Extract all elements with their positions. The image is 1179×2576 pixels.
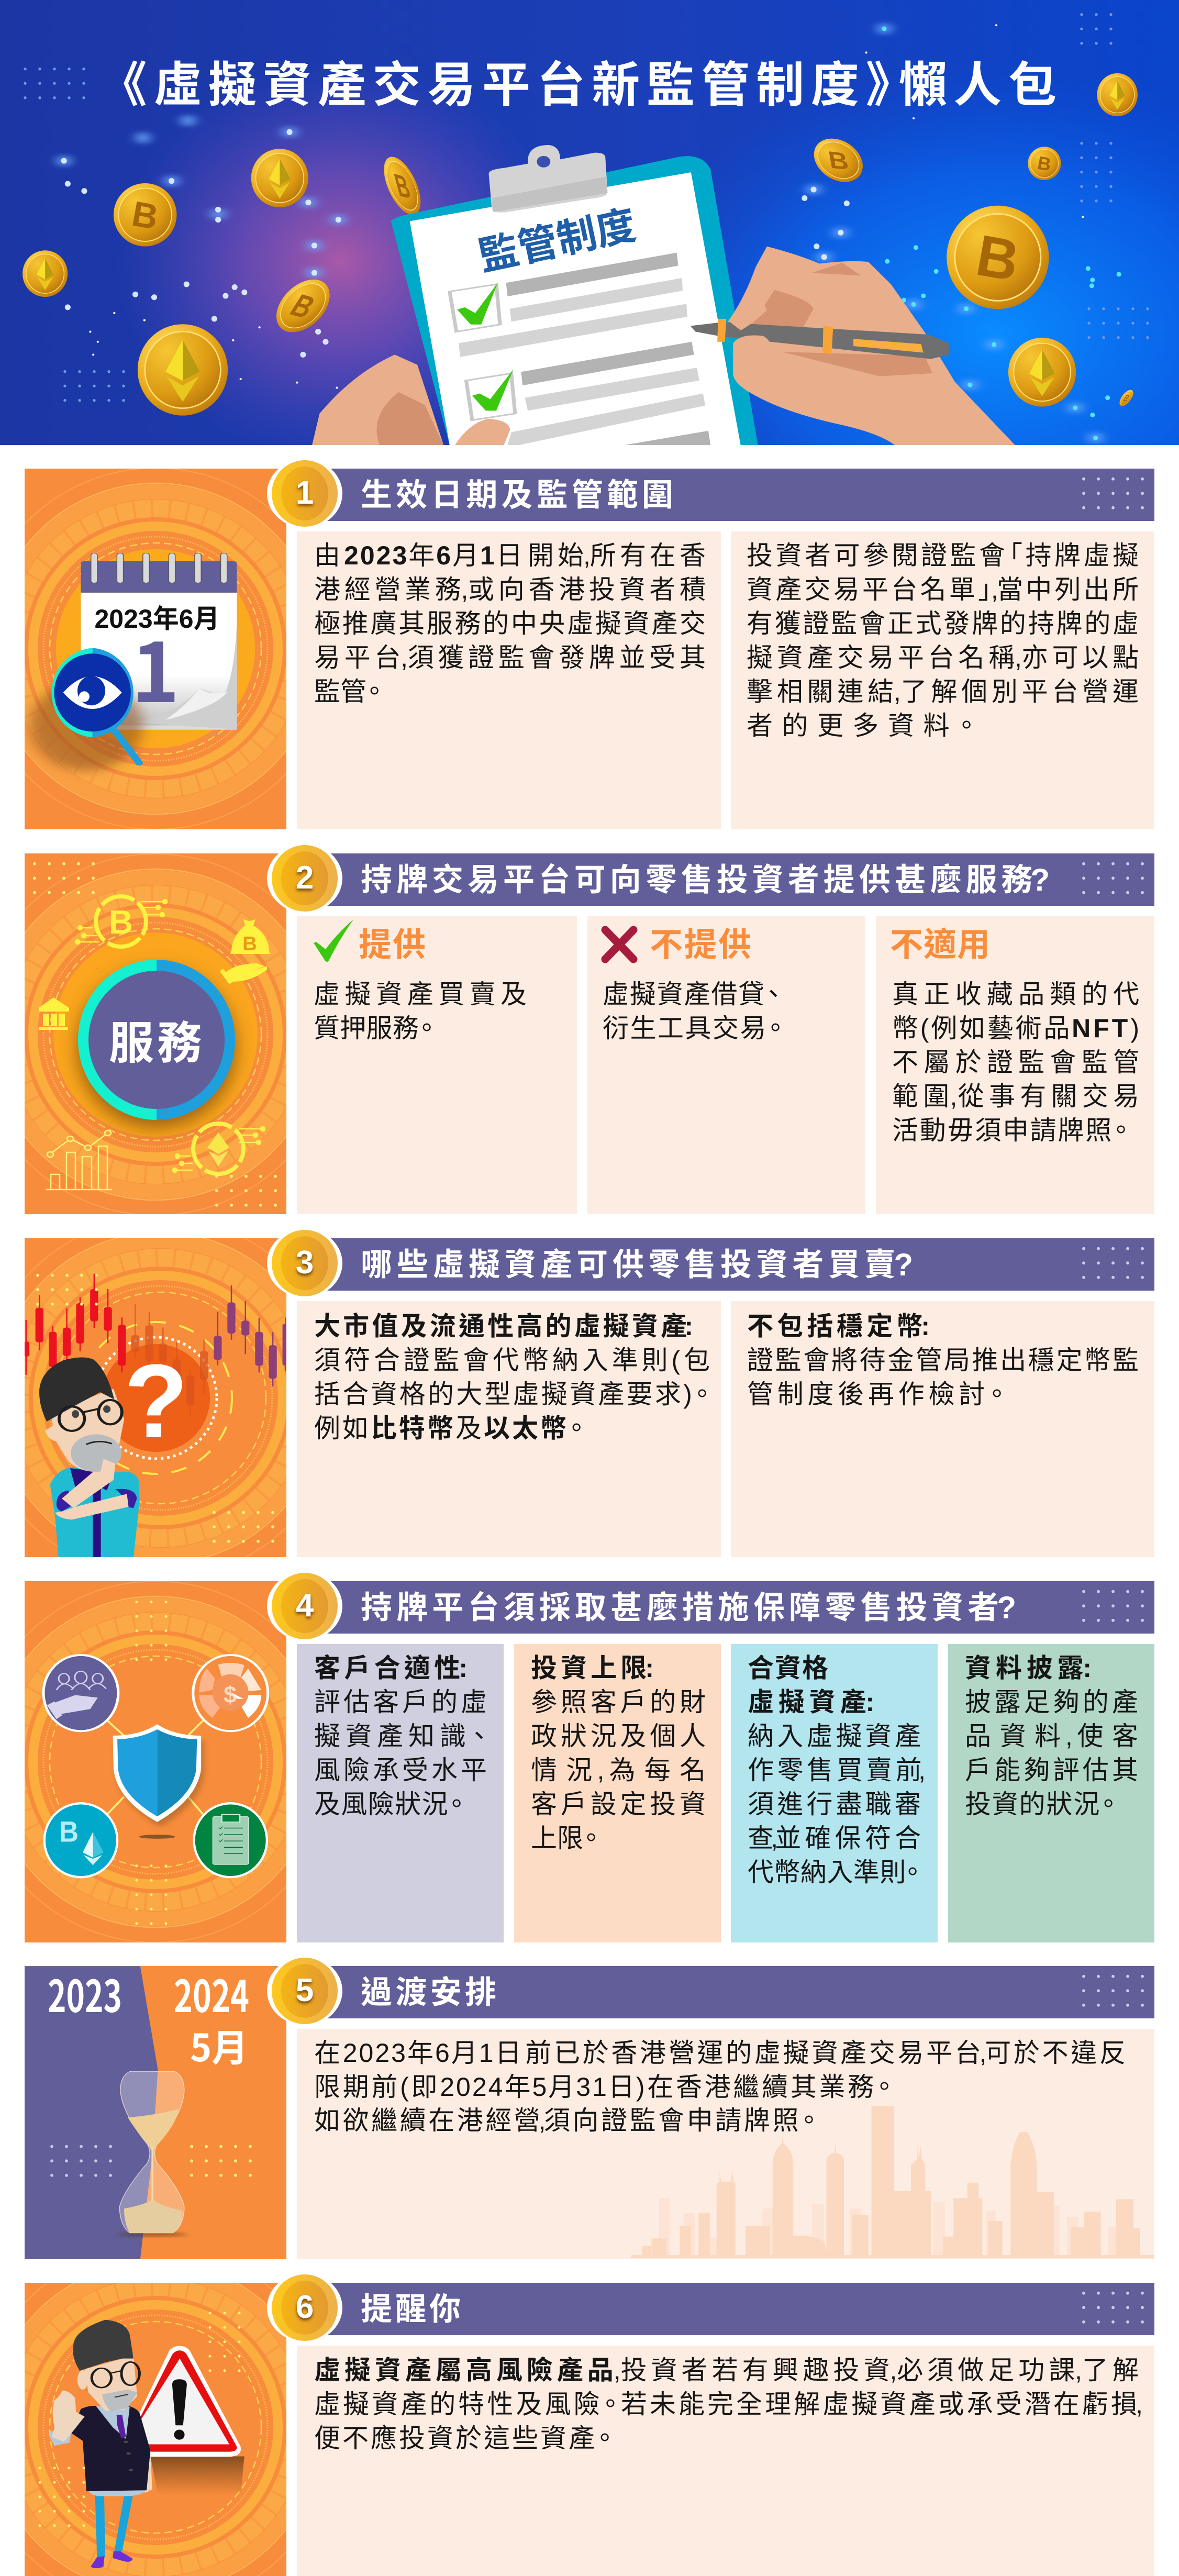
icon: money bag on hand xyxy=(220,919,270,984)
dots on panel top xyxy=(129,1595,173,1667)
number badge 5 xyxy=(267,1957,342,2025)
icon: ethereum ring xyxy=(173,1124,265,1174)
icon: thinking man xyxy=(39,1358,140,1557)
heading: 哪些虛擬資產可供零售投資者買賣? xyxy=(361,1247,913,1282)
icon: bar chart xyxy=(46,1130,112,1190)
section header bar xyxy=(314,1966,1154,2018)
section 4: investor protection xyxy=(25,1573,1154,1942)
text panel: large cap assets: 括合資格的大型虛擬資產要求)。 xyxy=(314,1380,715,1409)
panel: calendar illustration xyxy=(25,469,286,829)
panel: thinking man illustration xyxy=(25,1238,286,1557)
dots on bar xyxy=(1076,472,1150,515)
text panel: investment limit: 客戶設定投資 xyxy=(531,1790,706,1819)
header banner illustration xyxy=(0,0,1179,445)
text panel: risk reminder: 虛擬資產屬高風險產品,投資者若有興趣投資,必須做足功課,了解 xyxy=(314,2356,1139,2385)
text panel: client suitability: 評估客戶的虛 xyxy=(314,1687,487,1717)
text panel: investment limit: 投資上限: xyxy=(531,1653,654,1683)
text panel: transition: 如欲繼續在港經營,須向證監會申請牌照。 xyxy=(314,2106,822,2135)
text panel: not applicable: 真正收藏品類的代 xyxy=(892,980,1139,1009)
number badge 1 xyxy=(267,459,342,528)
dots on panel lower xyxy=(207,1505,280,1549)
number badge 4 xyxy=(267,1572,342,1640)
icon: services circle: 服務 xyxy=(109,1018,205,1069)
text panel: effective date: 極推廣其服務的中央虛擬資產交 xyxy=(314,609,706,638)
month May: 5月 xyxy=(190,2017,248,2072)
label: provided: 提供 xyxy=(359,927,426,963)
skyline illustration xyxy=(297,2029,1154,2259)
icon: people in hand xyxy=(42,1654,119,1732)
icon: bitcoin ring: B xyxy=(109,903,133,941)
text panel: provided: 質押服務。 xyxy=(314,1014,440,1043)
text panel: licensed list: 者的更多資料。 xyxy=(747,711,980,740)
text panel: eligible assets: 合資格 xyxy=(748,1653,828,1683)
text panel: provided xyxy=(297,916,577,1214)
sparkles xyxy=(64,25,1119,438)
section header bar xyxy=(314,1238,1154,1291)
text panel: disclosure: 投資的狀況。 xyxy=(965,1790,1121,1819)
text panel: transition: 2024年5月31日 xyxy=(440,2072,636,2102)
text panel: not applicable: NFT xyxy=(1072,1014,1130,1043)
text panel: investment limit: 政狀況及個人 xyxy=(531,1722,706,1751)
text panel: large cap assets: 大市值及流通性高的虛擬資產: xyxy=(314,1312,693,1341)
section 1: effective date and scope xyxy=(25,460,1154,829)
title: 《虛擬資產交易平台新監管制度》懶人包 xyxy=(99,59,1056,112)
text panel: stablecoins excluded: 管制度後再作檢討。 xyxy=(747,1380,1010,1409)
number badge 3 xyxy=(267,1229,342,1297)
text panel: transition xyxy=(297,2029,1154,2259)
text panel: investment limit: 上限。 xyxy=(531,1824,604,1853)
panel: hourglass illustration xyxy=(25,1966,286,2259)
text panel: investment limit xyxy=(514,1644,721,1942)
section 2: services xyxy=(25,845,1154,1214)
dots on panel xyxy=(27,857,101,900)
dots on panel bottom xyxy=(129,1859,173,1931)
icon: risk gauge: $ xyxy=(224,1682,237,1708)
text panel: eligible assets: 虛擬資產: xyxy=(748,1687,874,1717)
section 3: eligible assets xyxy=(25,1230,1154,1557)
text panel: disclosure: 資料披露: xyxy=(965,1653,1092,1683)
background glow xyxy=(115,63,1179,607)
text panel: eligible assets: 納入虛擬資產 xyxy=(748,1722,921,1751)
text panel: effective date: 港經營業務,或向香港投資者積 xyxy=(314,575,706,604)
number badge 5: 5 xyxy=(296,1972,314,2008)
text panel: large cap assets: 須符合證監會代幣納入準則(包 xyxy=(314,1346,710,1375)
dots on purple side xyxy=(45,2139,118,2183)
heading: 持牌交易平台可向零售投資者提供甚麼服務? xyxy=(361,862,1050,897)
text panel: eligible assets: 作零售買賣前, xyxy=(748,1756,926,1785)
text panel: licensed list: 投資者可參閱證監會「持牌虛擬 xyxy=(747,541,1139,570)
calendar day number: 1 xyxy=(131,607,180,726)
checklist bars xyxy=(459,253,710,445)
label: not provided: 不提供 xyxy=(650,927,751,963)
left thumb xyxy=(455,419,510,445)
text panel: not applicable: 幣(例如藝術品 ) xyxy=(892,1014,1139,1043)
icon: gold coins xyxy=(23,73,1138,416)
clipboard heading: 監管制度 xyxy=(475,203,640,280)
text panel: licensed list: 擬資產交易平台名稱,亦可以點 xyxy=(747,643,1139,672)
icon: magnifier with eye xyxy=(30,648,143,771)
text panel: stablecoins excluded: 證監會將待金管局推出穩定幣監 xyxy=(747,1346,1139,1375)
heading: 提醒你 xyxy=(361,2292,461,2327)
dot grids on banner xyxy=(24,13,1149,402)
number badge 3: 3 xyxy=(296,1245,314,1281)
section header bar xyxy=(314,2283,1154,2335)
text panel: eligible assets xyxy=(731,1644,938,1942)
section 5: transitional arrangement xyxy=(25,1966,1154,2259)
text panel: not applicable: 不屬於證監會監管 xyxy=(892,1048,1139,1077)
connector lines xyxy=(107,1720,203,1814)
icon: red cross xyxy=(601,926,638,963)
icon: money bag on hand: B xyxy=(242,933,257,955)
text panel: effective date: 由 開始,所有在香 xyxy=(314,541,706,570)
icon: green check xyxy=(314,919,353,962)
text panel: client suitability: 擬資產知識、 xyxy=(314,1722,492,1751)
text panel: licensed list xyxy=(731,531,1154,829)
clipboard xyxy=(391,145,758,445)
text panel: effective date: 易平台,須獲證監會發牌並受其 xyxy=(314,643,706,672)
icon: shield xyxy=(113,1724,204,1839)
text panel: licensed list: 資產交易平台名單」,當中列出所 xyxy=(747,575,1139,604)
text panel: provided: 虛擬資產買賣及 xyxy=(314,980,527,1009)
icon: crypto symbols xyxy=(43,1802,118,1878)
text panel: client suitability: 客戶合適性: xyxy=(314,1653,468,1683)
section 6: reminder xyxy=(25,2283,1154,2576)
number badge 1: 1 xyxy=(296,475,314,511)
text panel: disclosure xyxy=(948,1644,1154,1942)
text panel: not provided xyxy=(587,916,865,1214)
dots on bar xyxy=(1076,2286,1150,2329)
text panel: client suitability xyxy=(297,1644,504,1942)
number badge 6: 6 xyxy=(296,2289,314,2325)
heading: 生效日期及監管範圍 xyxy=(361,478,673,513)
text panel: disclosure: 戶能夠評估其 xyxy=(965,1756,1138,1785)
text panel: risk reminder: 便不應投資於這些資產。 xyxy=(314,2424,618,2453)
dots on bar xyxy=(1076,857,1150,900)
text panel: investment limit: 參照客戶的財 xyxy=(531,1687,706,1717)
icon: right hand with pen xyxy=(690,247,1015,445)
text panel: not provided: 虛擬資產借貸、 xyxy=(603,980,786,1009)
icon: bitcoin ring xyxy=(75,896,167,947)
dots on panel lower xyxy=(209,1169,283,1213)
text panel: licensed list: 有獲證監會正式發牌的持牌的虛 xyxy=(747,609,1139,638)
icon: man gesturing stop xyxy=(50,2320,152,2568)
dots on bar xyxy=(1076,1584,1150,1628)
text panel: transition: 2023年6月1日 xyxy=(343,2038,523,2068)
dots on bar xyxy=(1076,1969,1150,2013)
number badge 6 xyxy=(267,2273,342,2342)
text panel: eligible assets: 查,並確保符合 xyxy=(748,1824,921,1853)
text panel: risk reminder: 虛擬資產的特性及風險。若未能完全理解虛擬資產或承受潛在虧損, xyxy=(314,2390,1143,2419)
panel: warning illustration xyxy=(25,2283,286,2576)
heading: 持牌平台須採取甚麼措施保障零售投資者? xyxy=(361,1590,1016,1625)
text panel: transition: 在 前已於香港營運的虛擬資產交易平台,可於不違反 xyxy=(314,2038,1126,2068)
text panel: stablecoins excluded: 不包括穩定幣: xyxy=(747,1312,930,1341)
icon: check mark 2 xyxy=(466,369,515,420)
number badge 4: 4 xyxy=(296,1587,314,1624)
icon: risk gauge xyxy=(192,1654,269,1732)
text panel: client suitability: 及風險狀況。 xyxy=(314,1790,470,1819)
target rings xyxy=(80,1322,232,1474)
heading: 過渡安排 xyxy=(361,1975,496,2010)
panel: services illustration xyxy=(25,853,286,1214)
icon: warning triangle xyxy=(137,2346,244,2495)
section header bar xyxy=(314,1581,1154,1634)
text panel: large cap assets xyxy=(297,1301,721,1557)
text panel: not applicable: 範圍,從事有關交易 xyxy=(892,1082,1139,1111)
label: not applicable: 不適用 xyxy=(890,927,990,963)
text panel: not applicable xyxy=(876,916,1154,1214)
text panel: effective date xyxy=(297,531,721,829)
clip xyxy=(489,145,607,213)
text panel: not provided: 衍生工具交易。 xyxy=(603,1014,788,1043)
icon: crypto symbols: B xyxy=(59,1816,79,1848)
text panel: disclosure: 披露足夠的產 xyxy=(965,1687,1138,1717)
dots on orange side xyxy=(184,2139,258,2183)
icon: calendar xyxy=(81,553,237,730)
calendar month label: 2023年6月 xyxy=(94,604,220,634)
question mark: ? xyxy=(124,1343,188,1460)
section header bar xyxy=(314,469,1154,521)
text panel: effective date: 2023年6月1日 xyxy=(344,541,524,570)
dots on panel upper xyxy=(203,2306,247,2378)
section header bar xyxy=(314,853,1154,906)
icon: checklist clipboard xyxy=(193,1802,268,1878)
dots on panel lower xyxy=(32,2461,91,2533)
text panel: eligible assets: 須進行盡職審 xyxy=(748,1790,921,1819)
icon: left hand xyxy=(312,354,443,445)
text panel: effective date: 監管。 xyxy=(314,677,387,706)
panel: shield illustration xyxy=(25,1581,286,1942)
icon: hourglass xyxy=(118,2071,187,2236)
icon: check mark 1 xyxy=(450,283,500,332)
text panel: risk reminder xyxy=(297,2346,1154,2576)
dots on panel xyxy=(30,1268,104,1312)
icon: services circle xyxy=(78,960,235,1127)
text panel: client suitability: 風險承受水平 xyxy=(314,1756,487,1785)
candlestick chart xyxy=(25,1274,286,1415)
text panel: disclosure: 品資料,使客 xyxy=(965,1722,1138,1751)
text panel: transition: 限期前(即 )在香港繼續其業務。 xyxy=(314,2072,897,2102)
text panel: not applicable: 活動毋須申請牌照。 xyxy=(892,1116,1134,1145)
text panel: large cap assets: 例如比特幣及以太幣。 xyxy=(314,1414,590,1443)
text panel: stablecoins excluded xyxy=(731,1301,1154,1557)
number badge 2 xyxy=(267,844,342,913)
number badge 2: 2 xyxy=(296,860,314,896)
text panel: eligible assets: 代幣納入準則。 xyxy=(748,1858,926,1887)
dots on bar xyxy=(1076,1241,1150,1285)
text panel: licensed list: 擊相關連結,了解個別平台營運 xyxy=(747,677,1139,706)
icon: bank xyxy=(39,997,69,1030)
text panel: investment limit: 情況,為每名 xyxy=(531,1756,706,1785)
